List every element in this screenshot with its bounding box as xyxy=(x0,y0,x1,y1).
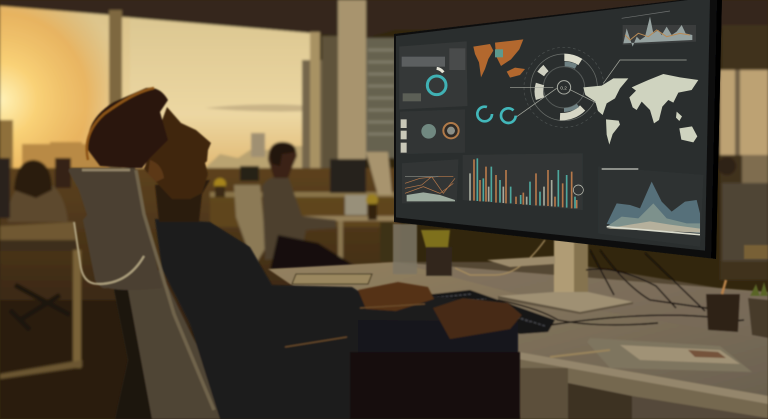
chart: line chart xyxy=(402,159,458,203)
monitor xyxy=(394,0,722,259)
chart: cream world map xyxy=(583,74,698,145)
panel: gauges top left xyxy=(399,41,467,109)
seated colleague, centre xyxy=(234,142,358,270)
pen cup xyxy=(706,294,740,332)
monitor stand xyxy=(554,240,588,300)
desk drawer xyxy=(568,383,632,419)
desk front edge xyxy=(440,338,768,419)
background desk with monitor and plants xyxy=(210,192,395,197)
far paper xyxy=(487,256,555,267)
panel: small dials xyxy=(400,109,465,154)
small plant xyxy=(748,298,768,338)
chart: radial gauge xyxy=(510,47,687,127)
chart: radial gauge: 0.2 xyxy=(560,85,567,90)
cables xyxy=(498,250,744,325)
chart: bar chart xyxy=(463,153,583,210)
city skyline xyxy=(22,142,118,174)
desk xyxy=(268,224,768,419)
chart: orange world map xyxy=(473,39,525,78)
chart: area chart xyxy=(598,167,703,247)
paper on far desk xyxy=(292,274,372,284)
windows and sky xyxy=(0,0,312,180)
sleeve highlight xyxy=(285,304,425,347)
glass and plant xyxy=(393,224,417,274)
left desk xyxy=(0,222,76,242)
body xyxy=(155,219,474,419)
neck and face xyxy=(155,180,210,222)
screen xyxy=(396,0,710,251)
chair headrest xyxy=(68,168,162,290)
far right window xyxy=(720,70,768,155)
hair xyxy=(88,88,168,168)
monitor side highlight xyxy=(711,0,722,259)
interior wall and floor xyxy=(0,168,400,419)
chart: two teal donuts xyxy=(477,107,516,123)
desk top surface xyxy=(268,262,768,398)
window mullions and column xyxy=(109,10,122,180)
chair lower back xyxy=(112,270,222,419)
monitor bezel xyxy=(394,0,722,259)
seated analyst and chair xyxy=(68,88,522,419)
right hand on mouse xyxy=(433,298,522,339)
towers beyond the windows xyxy=(302,60,332,190)
ear xyxy=(148,160,164,182)
keyboard xyxy=(425,290,555,334)
ceiling xyxy=(0,0,768,38)
left hand on keyboard xyxy=(358,282,434,311)
tablet and pencil on desk xyxy=(587,338,752,372)
seated colleague, left xyxy=(8,186,68,222)
chart: top right spectrum xyxy=(622,11,696,47)
